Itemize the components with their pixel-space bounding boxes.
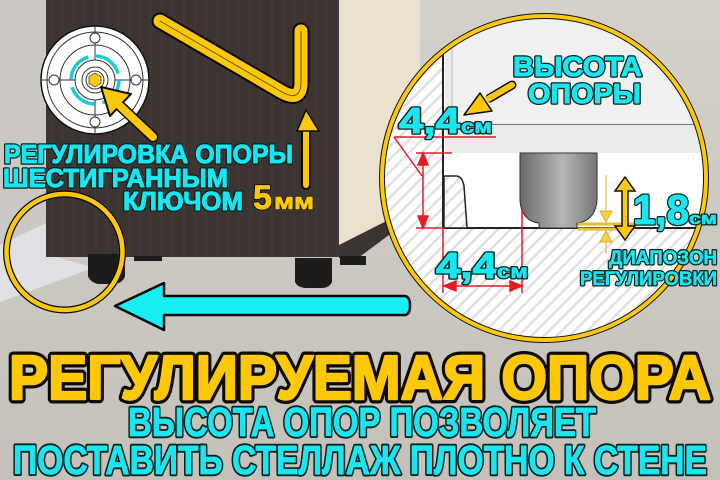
text: adjustment with hex key: 5 bbox=[253, 179, 272, 217]
value: range 1.8 cm: 1,8 bbox=[633, 186, 689, 233]
label: support height: ОПОРЫ bbox=[528, 78, 641, 109]
text: adjustment with hex key: КЛЮЧОМ bbox=[123, 186, 243, 216]
value: width 4.4 cm: см bbox=[497, 262, 528, 283]
arrow to height value bbox=[464, 85, 512, 115]
subtitle line one: ВЫСОТА ОПОР ПОЗВОЛЯЕТ bbox=[128, 399, 596, 445]
rosette: adjuster foot top view bbox=[41, 26, 149, 134]
value: range 1.8 cm: 1,8 bbox=[633, 186, 689, 233]
value: height 4.4 cm: 4,4 bbox=[399, 100, 460, 141]
text: adjustment with hex key bbox=[3, 139, 314, 217]
large cyan arrow pointing to wall bbox=[115, 283, 410, 330]
value: range 1.8 cm bbox=[633, 186, 717, 233]
foot cross-section bbox=[520, 153, 597, 228]
arrow up to hex key bbox=[297, 110, 319, 185]
zoomed cross-section circle bbox=[380, 10, 720, 348]
arrow to hex socket bbox=[101, 87, 153, 137]
label: support height: ВЫСОТА bbox=[513, 51, 642, 82]
callout circle on cabinet foot bbox=[6, 194, 122, 310]
label: support height: ОПОРЫ bbox=[528, 78, 641, 109]
yellow range markers bbox=[578, 175, 634, 254]
text: adjustment with hex key: 5 bbox=[253, 179, 272, 217]
value: width 4.4 cm: см bbox=[497, 262, 528, 283]
text: adjustment with hex key: ШЕСТИГРАННЫМ bbox=[3, 163, 228, 193]
label: support height: ВЫСОТА bbox=[513, 51, 642, 82]
subtitle line one: ВЫСОТА ОПОР ПОЗВОЛЯЕТ bbox=[128, 399, 596, 445]
label: adjustment range: РЕГУЛИРОВКИ bbox=[580, 269, 717, 290]
value: width 4.4 cm: 4,4 bbox=[436, 245, 497, 286]
text: adjustment with hex key: мм bbox=[274, 189, 314, 214]
value: height 4.4 cm: см bbox=[461, 117, 492, 138]
label: adjustment range: РЕГУЛИРОВКИ bbox=[580, 269, 717, 290]
value: height 4.4 cm: см bbox=[461, 117, 492, 138]
label: adjustment range: ДИАПОЗОН bbox=[609, 248, 717, 269]
value: width 4.4 cm: 4,4 bbox=[436, 245, 497, 286]
cabinet feet bbox=[88, 254, 366, 288]
label: adjustment range bbox=[580, 248, 717, 290]
text: adjustment with hex key: КЛЮЧОМ bbox=[123, 186, 243, 216]
text: adjustment with hex key: ШЕСТИГРАННЫМ bbox=[3, 163, 228, 193]
label: support height bbox=[513, 51, 642, 109]
value: height 4.4 cm: 4,4 bbox=[399, 100, 460, 141]
value: range 1.8 cm: см bbox=[689, 209, 717, 228]
value: height 4.4 cm bbox=[399, 100, 492, 141]
cabinet dark wood panel bbox=[46, 0, 339, 257]
double arrow 1.8 cm bbox=[615, 177, 635, 240]
skirting board profile bbox=[444, 176, 467, 228]
label: adjustment range: ДИАПОЗОН bbox=[609, 248, 717, 269]
text: adjustment with hex key: мм bbox=[274, 189, 314, 214]
value: range 1.8 cm: см bbox=[689, 209, 717, 228]
icon: hex key 5 mm bbox=[160, 21, 301, 96]
red dimension lines bbox=[394, 137, 522, 293]
text: adjustment with hex key: РЕГУЛИРОВКА ОПОРЫ bbox=[4, 139, 293, 169]
text: adjustment with hex key: РЕГУЛИРОВКА ОПОРЫ bbox=[4, 139, 293, 169]
value: width 4.4 cm bbox=[436, 245, 528, 286]
